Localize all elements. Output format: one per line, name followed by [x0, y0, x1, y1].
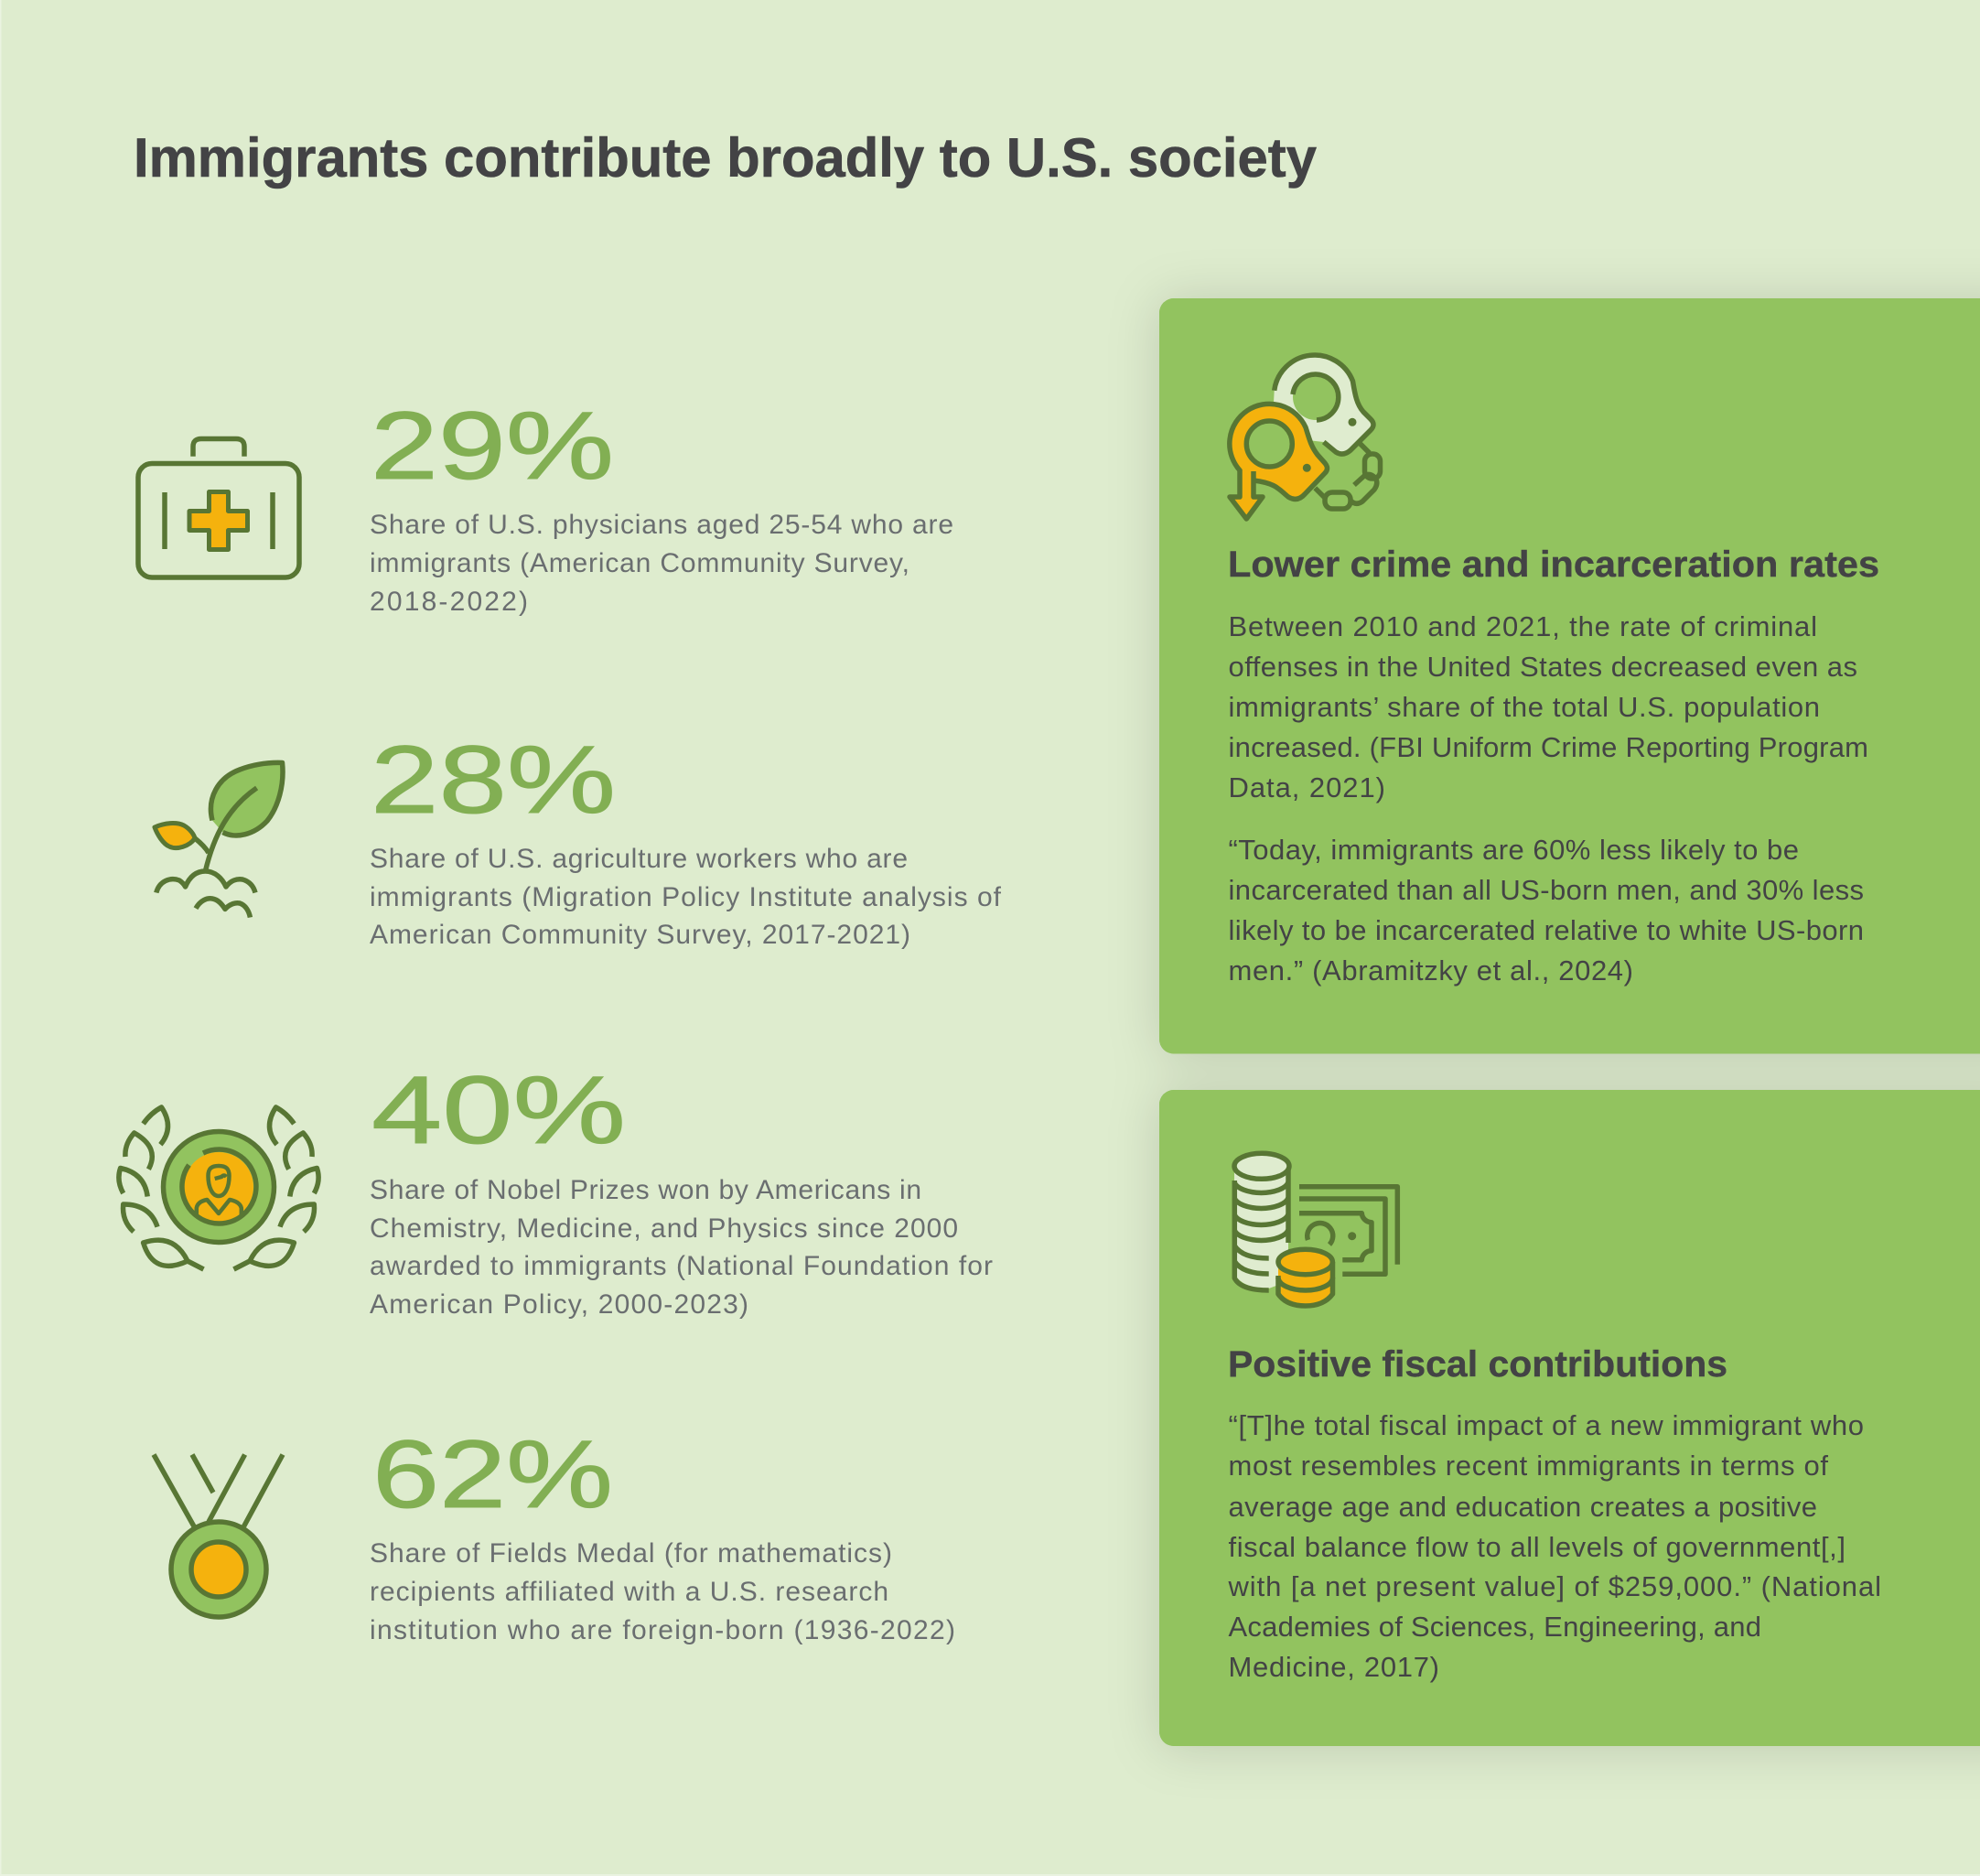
title: Immigrants contribute broadly to U.S. society — [134, 127, 1318, 189]
paragraph: fiscal impact quote: average age and education creates a positive — [1228, 1491, 1817, 1523]
stat: 40% Nobel Prizes — [119, 1057, 993, 1320]
number: 29%: 29% — [371, 393, 614, 500]
number: 40%: 40% — [371, 1057, 626, 1164]
heading: Lower crime and incarceration rates — [1228, 544, 1879, 585]
paragraph: fiscal impact quote: Academies of Sciences, Engineering, and — [1228, 1611, 1761, 1643]
paragraph: incarceration quote: “Today, immigrants are 60% less likely to be — [1228, 834, 1799, 866]
icon: medal — [154, 1455, 283, 1617]
stat: 28% agriculture — [155, 727, 1002, 950]
description: American Community Survey, 2017-2021) — [370, 920, 910, 950]
paragraph: crime statistics: offenses in the United States decreased even as — [1228, 651, 1857, 683]
panel: positive fiscal contributions — [1159, 1090, 1980, 1746]
paragraph: incarceration quote: men.” (Abramitzky et al., 2024) — [1228, 954, 1633, 987]
paragraph: crime statistics: Data, 2021) — [1228, 771, 1385, 803]
icon: sprout — [155, 762, 283, 917]
description: immigrants (Migration Policy Institute analysis of — [370, 882, 1002, 912]
description — [370, 844, 1002, 950]
icon: laurel wreath with laureate — [119, 1107, 318, 1269]
description: American Policy, 2000-2023) — [370, 1289, 748, 1320]
paragraph: incarceration quote: likely to be incarcerated relative to white US-born — [1228, 914, 1864, 946]
paragraph: crime statistics: increased. (FBI Uniform Crime Reporting Program — [1228, 731, 1868, 763]
paragraph: fiscal impact quote: most resembles recent immigrants in terms of — [1228, 1450, 1828, 1482]
description: immigrants (American Community Survey, — [370, 548, 909, 578]
paragraph: incarceration quote — [1228, 834, 1864, 987]
icon: handcuffs with down arrow — [1230, 355, 1380, 519]
description — [370, 510, 953, 617]
icon: coins and banknotes — [1234, 1153, 1397, 1306]
description: awarded to immigrants (National Foundation for — [370, 1251, 993, 1281]
description: Share of U.S. agriculture workers who are — [370, 844, 908, 874]
description — [370, 1538, 955, 1645]
stat: 29% physicians — [138, 393, 953, 617]
number: 62%: 62% — [372, 1421, 613, 1528]
paragraph: crime statistics — [1228, 610, 1868, 803]
paragraph: fiscal impact quote — [1228, 1409, 1881, 1683]
description: Share of Fields Medal (for mathematics) — [370, 1538, 892, 1569]
paragraph: incarceration quote: incarcerated than all US-born men, and 30% less — [1228, 874, 1864, 906]
paragraph: crime statistics: Between 2010 and 2021, the rate of criminal — [1228, 610, 1817, 642]
description: institution who are foreign-born (1936-2022) — [370, 1615, 955, 1645]
panel: lower crime and incarceration rates — [1159, 298, 1980, 1054]
description: 2018-2022) — [370, 587, 528, 617]
description: Chemistry, Medicine, and Physics since 2000 — [370, 1213, 958, 1244]
paragraph: crime statistics: immigrants’ share of the total U.S. population — [1228, 691, 1820, 723]
paragraph: fiscal impact quote: with [a net present value] of $259,000.” (National — [1228, 1570, 1881, 1602]
paragraph: fiscal impact quote: Medicine, 2017) — [1228, 1651, 1439, 1683]
heading: Positive fiscal contributions — [1228, 1344, 1727, 1385]
description: recipients affiliated with a U.S. research — [370, 1577, 888, 1607]
description — [370, 1175, 993, 1320]
number: 28%: 28% — [371, 727, 616, 834]
icon: medical kit — [138, 439, 299, 577]
description: Share of U.S. physicians aged 25-54 who are — [370, 510, 953, 540]
paragraph: fiscal impact quote: fiscal balance flow to all levels of government[,] — [1228, 1531, 1845, 1563]
stat: 62% Fields Medal — [154, 1421, 955, 1645]
description: Share of Nobel Prizes won by Americans in — [370, 1175, 921, 1205]
paragraph: fiscal impact quote: “[T]he total fiscal impact of a new immigrant who — [1228, 1409, 1864, 1441]
